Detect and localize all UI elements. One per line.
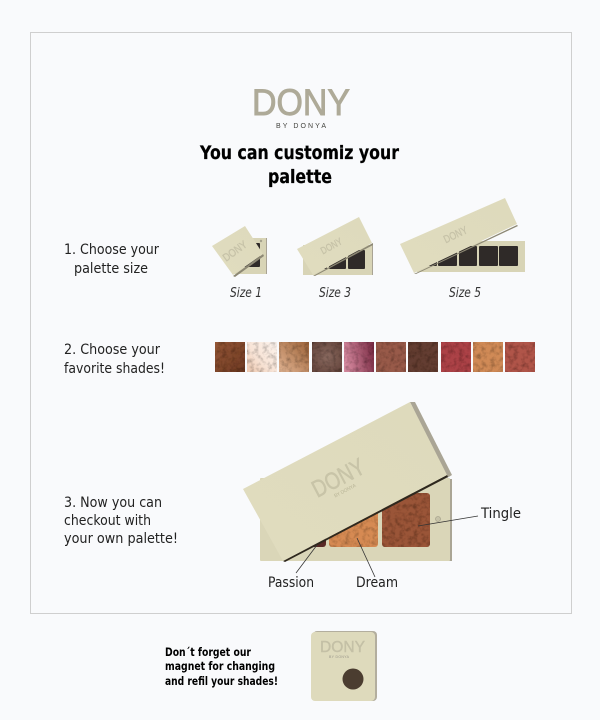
- palette size 5: DONY: [442, 224, 470, 246]
- step 2 label: [64, 342, 165, 377]
- step 1 label: palette size: [74, 261, 148, 277]
- lid logo: DONY: [307, 453, 370, 503]
- large palette: [243, 402, 452, 562]
- magnet note: Don´t forget our: [165, 645, 251, 659]
- shade swatches: [215, 342, 535, 372]
- callout: Tingle: [418, 506, 521, 526]
- callout: Dream: Dream: [356, 575, 398, 591]
- magnet note: [165, 645, 278, 688]
- magnet note: and refil your shades!: [165, 674, 278, 688]
- lid logo: BY DONYA: [333, 483, 358, 499]
- panel frame: [30, 32, 572, 614]
- size 1 caption: Size 1: [230, 286, 262, 301]
- step 3 label: your own palette!: [64, 531, 178, 547]
- shade pans: [275, 493, 430, 547]
- step 3 label: checkout with: [64, 513, 151, 529]
- pan hole: [436, 516, 440, 522]
- step 1 label: [64, 242, 159, 277]
- step 3 label: 3. Now you can: [64, 495, 162, 511]
- callout: Passion: [268, 545, 317, 591]
- palette size 3: DONY: [319, 236, 345, 257]
- title: You can customiz your: [199, 142, 400, 164]
- palette size 1: [212, 226, 267, 277]
- brand logo: DONY: [252, 82, 350, 123]
- magnet note: magnet for changing: [165, 659, 275, 673]
- palette size 5: [400, 198, 525, 274]
- step 3 label: [64, 495, 178, 547]
- size 5 caption: Size 5: [449, 286, 481, 301]
- palette base: [260, 478, 452, 561]
- callout: Tingle: Tingle: [480, 506, 521, 522]
- lid shadow: [410, 402, 452, 478]
- step 2 label: favorite shades!: [64, 361, 165, 377]
- magnet: BY DONYA: [329, 655, 350, 659]
- brand logo: BY DONYA: [276, 123, 326, 130]
- step 2 label: 2. Choose your: [64, 342, 160, 358]
- size 3 caption: Size 3: [319, 286, 351, 301]
- palette size 3: [297, 217, 373, 276]
- magnet: [311, 631, 377, 701]
- palette size 1: DONY: [221, 238, 250, 264]
- callout: Passion: Passion: [268, 575, 314, 591]
- lid dark edge: [283, 475, 448, 562]
- palette lid: [243, 402, 447, 561]
- title: [199, 142, 400, 188]
- magnet: DONY: [320, 639, 365, 656]
- title: palette: [268, 166, 332, 188]
- callout: Dream: [356, 538, 398, 591]
- step 1 label: 1. Choose your: [64, 242, 159, 258]
